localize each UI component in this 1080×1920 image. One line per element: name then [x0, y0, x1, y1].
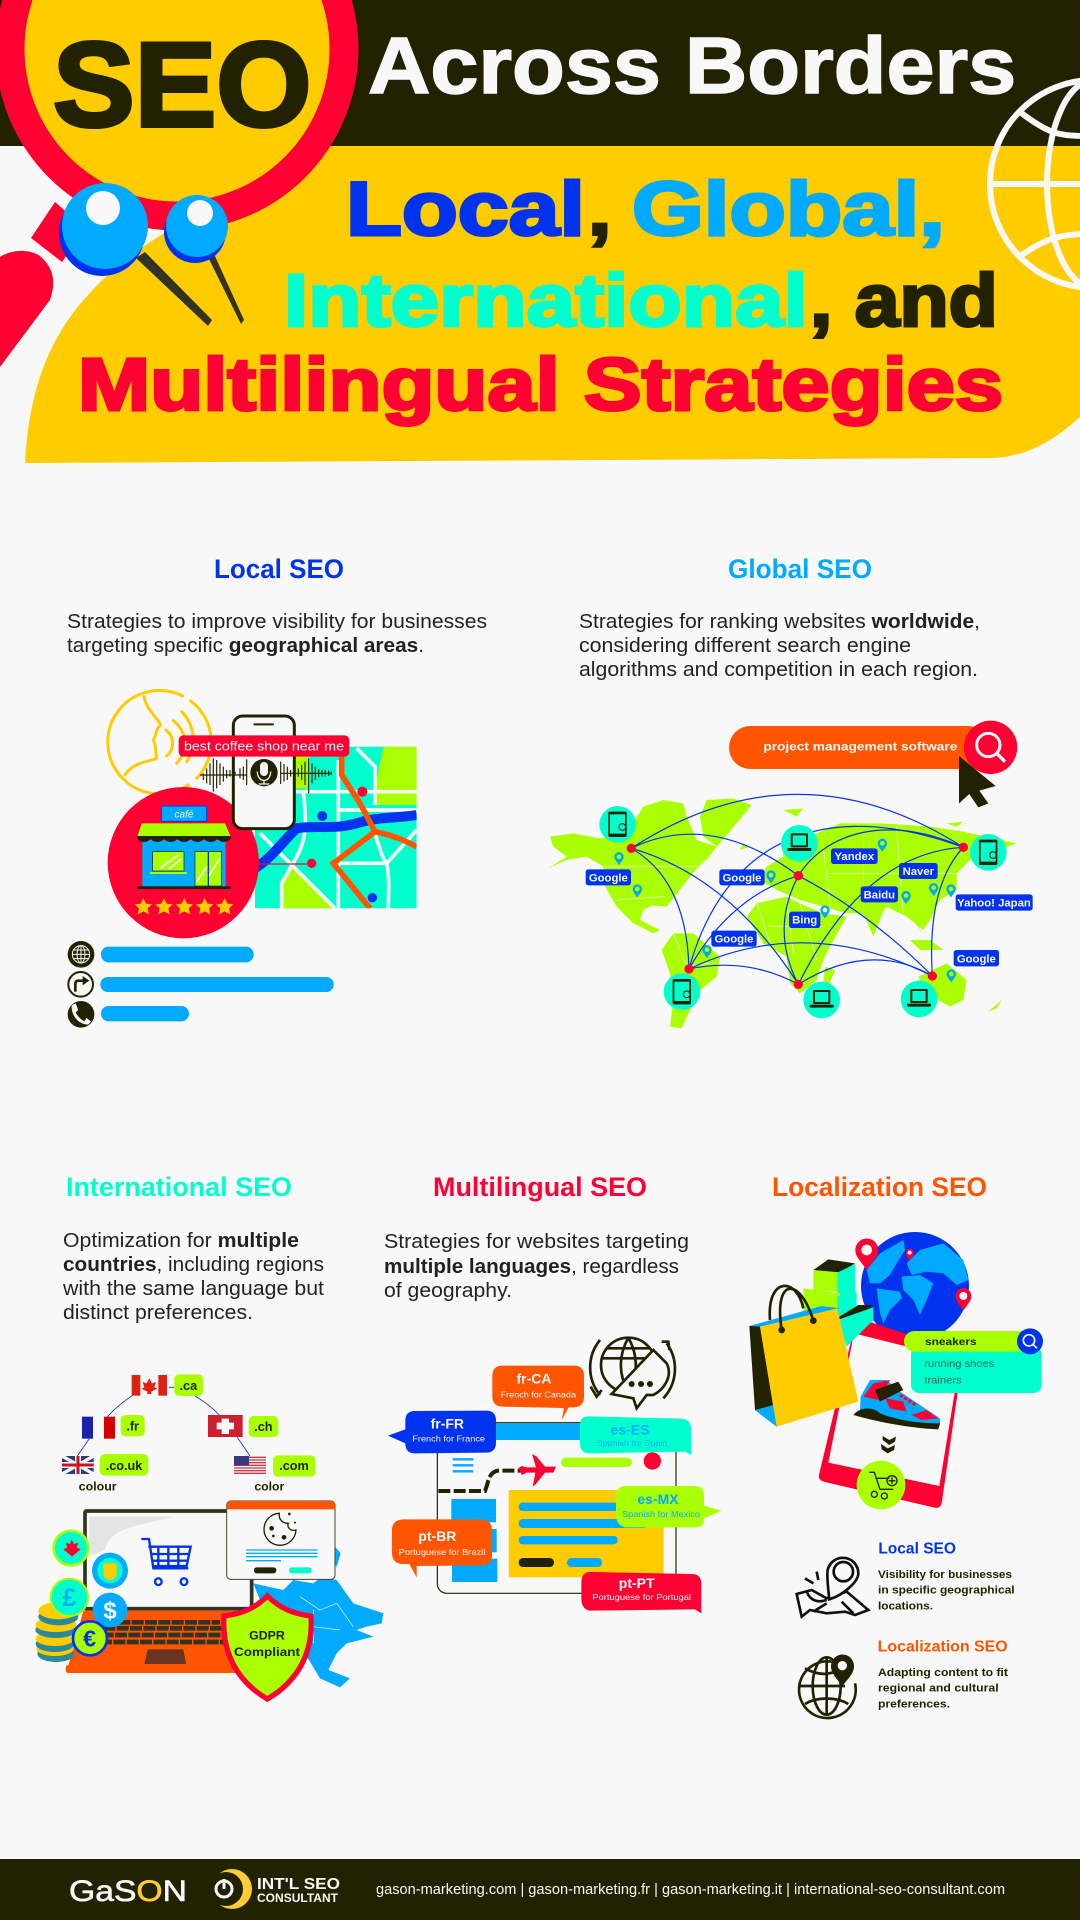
- illustration: world network: Naver: [903, 866, 935, 878]
- phone: [233, 716, 294, 829]
- icon: phone: [68, 1001, 94, 1028]
- icon: airplane: [518, 1454, 556, 1487]
- bubble: es-MX: [616, 1486, 721, 1527]
- shopping bag: [749, 1286, 858, 1427]
- illustration: world network: Bing: [792, 915, 817, 927]
- laptop: [66, 1511, 269, 1673]
- dark title band: [0, 0, 1080, 146]
- title: SEO: SEO: [53, 17, 311, 152]
- search bar: [729, 726, 989, 769]
- text block: local description: Strategies to improve visibility for businesses: [67, 610, 487, 633]
- icon: cafe storefront: café: [175, 809, 194, 820]
- flight path: [438, 1471, 520, 1491]
- icon: cafe storefront: [137, 806, 231, 889]
- text block: multilingual description: multiple languages, regardless: [384, 1255, 679, 1278]
- badge: .co.uk: [100, 1454, 148, 1476]
- icon: red pins: [855, 1238, 971, 1311]
- cookie popup: [227, 1501, 335, 1579]
- subtitle: comma and: , and: [810, 260, 998, 342]
- panel: local SEO: [67, 554, 487, 1028]
- heading: International SEO: International SEO: [66, 1172, 292, 1202]
- chevron arrows: [881, 1436, 896, 1453]
- footer: [0, 1859, 1080, 1920]
- legend text: local: in specific geographical: [878, 1585, 1015, 1597]
- shop circle: [108, 787, 259, 938]
- bubble: pt-PT: Portuguese for Portugal: [592, 1592, 691, 1602]
- badge: .fr: .fr: [126, 1419, 139, 1433]
- bubble: fr-CA: fr-CA: [517, 1371, 551, 1387]
- search suggestions: sneakers: [925, 1337, 977, 1348]
- legend text: localization: Adapting content to fit: [878, 1667, 1009, 1679]
- bubble: es-ES: es-ES: [611, 1422, 649, 1438]
- search query label: [179, 735, 349, 757]
- subtitle: International: International: [284, 260, 808, 342]
- subtitle: Local: Local: [346, 166, 585, 251]
- icon: shopping cart: [141, 1539, 191, 1585]
- legend: local and localization: [797, 1541, 1015, 1718]
- bubble: pt-PT: [581, 1572, 701, 1613]
- icon: globe pin: [798, 1657, 856, 1718]
- badge: .ca: [174, 1374, 203, 1396]
- title: Across Borders: Across Borders: [368, 21, 1016, 110]
- text block: multilingual description: Strategies for websites targeting: [384, 1230, 689, 1253]
- illustration: country targeting: [35, 1374, 383, 1699]
- legend text: local: Visibility for businesses: [878, 1569, 1012, 1581]
- search suggestions: running shoes: [924, 1359, 994, 1370]
- text block: international description: Optimization for multiple: [63, 1229, 299, 1252]
- icon: website: [68, 941, 94, 968]
- icon: directions: [68, 972, 93, 997]
- illustration: local search: [68, 690, 417, 1028]
- connecting lines: [77, 1387, 250, 1456]
- logo: Int'l SEO Consultant: INT'L SEO: [257, 1876, 340, 1893]
- flag: USA: [234, 1456, 266, 1474]
- contact bars: [101, 947, 254, 962]
- legend heading: Local SEO: Local SEO: [878, 1541, 956, 1558]
- illustration: world network: Yahoo! Japan: [957, 897, 1031, 909]
- badge: .ch: .ch: [254, 1420, 272, 1434]
- phone frame: [819, 1317, 963, 1508]
- heading: Multilingual SEO: Multilingual SEO: [433, 1172, 647, 1202]
- bubble: es-ES: Spanish for Spain: [597, 1438, 668, 1448]
- illustration: localized shopping: [749, 1232, 1043, 1509]
- text block: global description: [579, 610, 980, 681]
- panel: multilingual SEO: [384, 1172, 721, 1613]
- legend text: local: locations.: [878, 1601, 933, 1613]
- bubble: pt-BR: [392, 1519, 492, 1577]
- legend text: localization: [878, 1667, 1008, 1711]
- location pins: [614, 839, 956, 982]
- logo: Int'l SEO Consultant: [209, 1869, 340, 1909]
- text block: multilingual description: [384, 1230, 689, 1302]
- panel: international SEO: [35, 1172, 383, 1699]
- currency coins: [51, 1531, 128, 1655]
- search suggestions: [904, 1328, 1043, 1393]
- network arcs: [631, 794, 963, 984]
- subtitle: Multilingual Strategies: Multilingual Strategies: [78, 344, 1003, 427]
- icon: map pin: [797, 1558, 868, 1617]
- illustration: world network: Yandex: [834, 851, 875, 863]
- text block: global description: considering different search engine: [579, 634, 911, 657]
- cart button: [857, 1461, 905, 1509]
- subtitle: Global: Global,: [632, 166, 945, 251]
- illustration: world network: Google: [589, 872, 628, 884]
- currency coins: $: [103, 1598, 117, 1625]
- bubble: es-MX: es-MX: [637, 1491, 679, 1507]
- illustration: world network: Baidu: [864, 889, 895, 901]
- world map: [548, 798, 1017, 1028]
- network nodes: [627, 843, 968, 989]
- illustration: language website: [388, 1338, 721, 1613]
- currency coins: €: [83, 1626, 96, 1652]
- search suggestions: trainers: [924, 1376, 962, 1387]
- badge: .com: .com: [279, 1459, 309, 1473]
- bubble: fr-CA: French for Canada: [501, 1390, 576, 1400]
- bubble: es-MX: Spanish for Mexico: [622, 1509, 700, 1519]
- illustration: world network: [548, 721, 1033, 1028]
- text block: local description: [67, 610, 487, 657]
- icon: cursor: [959, 756, 996, 807]
- text block: international description: with the same language but: [62, 1277, 324, 1300]
- legend text: localization: regional and cultural: [878, 1683, 999, 1695]
- badge: .fr: [121, 1415, 145, 1436]
- bubble: fr-FR: fr-FR: [431, 1416, 464, 1432]
- illustration: local search: best coffee shop near me: [184, 739, 344, 753]
- device icons: [599, 806, 1007, 1018]
- badge: .ch: [249, 1416, 278, 1437]
- text block: global description: algorithms and competition in each region.: [579, 658, 978, 681]
- coin stack: [35, 1602, 78, 1662]
- illustration: world network: Google: [957, 953, 996, 965]
- Europe map: [253, 1547, 383, 1687]
- bubble: es-ES: [580, 1416, 691, 1455]
- text block: multilingual description: of geography.: [384, 1279, 512, 1302]
- text block: global description: Strategies for ranking websites worldwide,: [579, 610, 980, 633]
- flag: France: [82, 1417, 115, 1439]
- icon: map pins: [59, 183, 244, 326]
- icon: microphone: [250, 759, 278, 786]
- badge: .co.uk: .co.uk: [106, 1459, 143, 1473]
- icon: sneaker: [853, 1380, 940, 1429]
- legend text: localization: preferences.: [878, 1699, 950, 1711]
- logo: Int'l SEO Consultant: CONSULTANT: [257, 1891, 339, 1905]
- illustration: world network: Google: [722, 872, 762, 884]
- legend heading: Localization SEO: Localization SEO: [878, 1639, 1008, 1656]
- icon: speaking face: [108, 690, 211, 794]
- country borders: [605, 827, 957, 967]
- currency coins: £: [62, 1585, 76, 1612]
- label: color: color: [254, 1481, 285, 1494]
- panel: global SEO: [548, 554, 1033, 1028]
- boxes: [803, 1259, 873, 1347]
- panel: localization SEO: [749, 1172, 1043, 1718]
- illustration: world network: project management software: [763, 740, 957, 754]
- bubble: fr-FR: [388, 1411, 496, 1453]
- icon: white globe: [990, 80, 1080, 288]
- label: colour: colour: [79, 1481, 117, 1494]
- five star rating: [135, 898, 233, 914]
- bubble: pt-PT: pt-PT: [619, 1575, 655, 1591]
- bubble: fr-FR: French for France: [412, 1434, 485, 1444]
- heading: Localization SEO: Localization SEO: [772, 1172, 987, 1202]
- header banner: [0, 0, 1080, 463]
- heading: Local SEO: Local SEO: [214, 554, 344, 584]
- waveform: [200, 758, 332, 793]
- bubble: fr-CA: [492, 1366, 584, 1420]
- browser window: [437, 1423, 676, 1593]
- footer links: gason-marketing.com | gason-marketing.fr | gason-marketing.it | international-seo-consultant.com: [376, 1882, 1005, 1898]
- legend text: local: [878, 1569, 1015, 1613]
- shield: GDPR compliant: GDPR: [249, 1629, 285, 1643]
- shield: GDPR compliant: [224, 1596, 311, 1699]
- bubble: pt-BR: Portuguese for Brazil: [399, 1547, 485, 1557]
- comma: ,: [587, 166, 612, 251]
- logo: Gason: GaSON: [69, 1875, 187, 1908]
- search engine labels: [586, 848, 1033, 966]
- yellow header shape: [25, 146, 1080, 463]
- heading: Global SEO: Global SEO: [728, 554, 872, 584]
- red pointer: [257, 862, 307, 866]
- icon: search button: [964, 721, 1017, 774]
- bubble: pt-BR: pt-BR: [418, 1528, 456, 1544]
- icon: magnifying glass: [0, 0, 344, 367]
- illustration: world network: Google: [714, 934, 754, 946]
- text block: international description: countries, including regions: [63, 1253, 324, 1276]
- map: [255, 747, 417, 908]
- globe: [861, 1232, 969, 1340]
- flag: Switzerland: [208, 1415, 243, 1437]
- badge: .com: [273, 1455, 315, 1477]
- text block: international description: distinct preferences.: [63, 1301, 253, 1324]
- badge: .ca: .ca: [180, 1379, 198, 1393]
- icon: translation globe: [590, 1338, 675, 1408]
- flag: Canada: [132, 1375, 167, 1396]
- text block: local description: targeting specific geographical areas.: [67, 634, 424, 657]
- flag: UK: [62, 1456, 94, 1474]
- text block: international description: [62, 1229, 324, 1324]
- shield: GDPR compliant: Compliant: [234, 1645, 300, 1659]
